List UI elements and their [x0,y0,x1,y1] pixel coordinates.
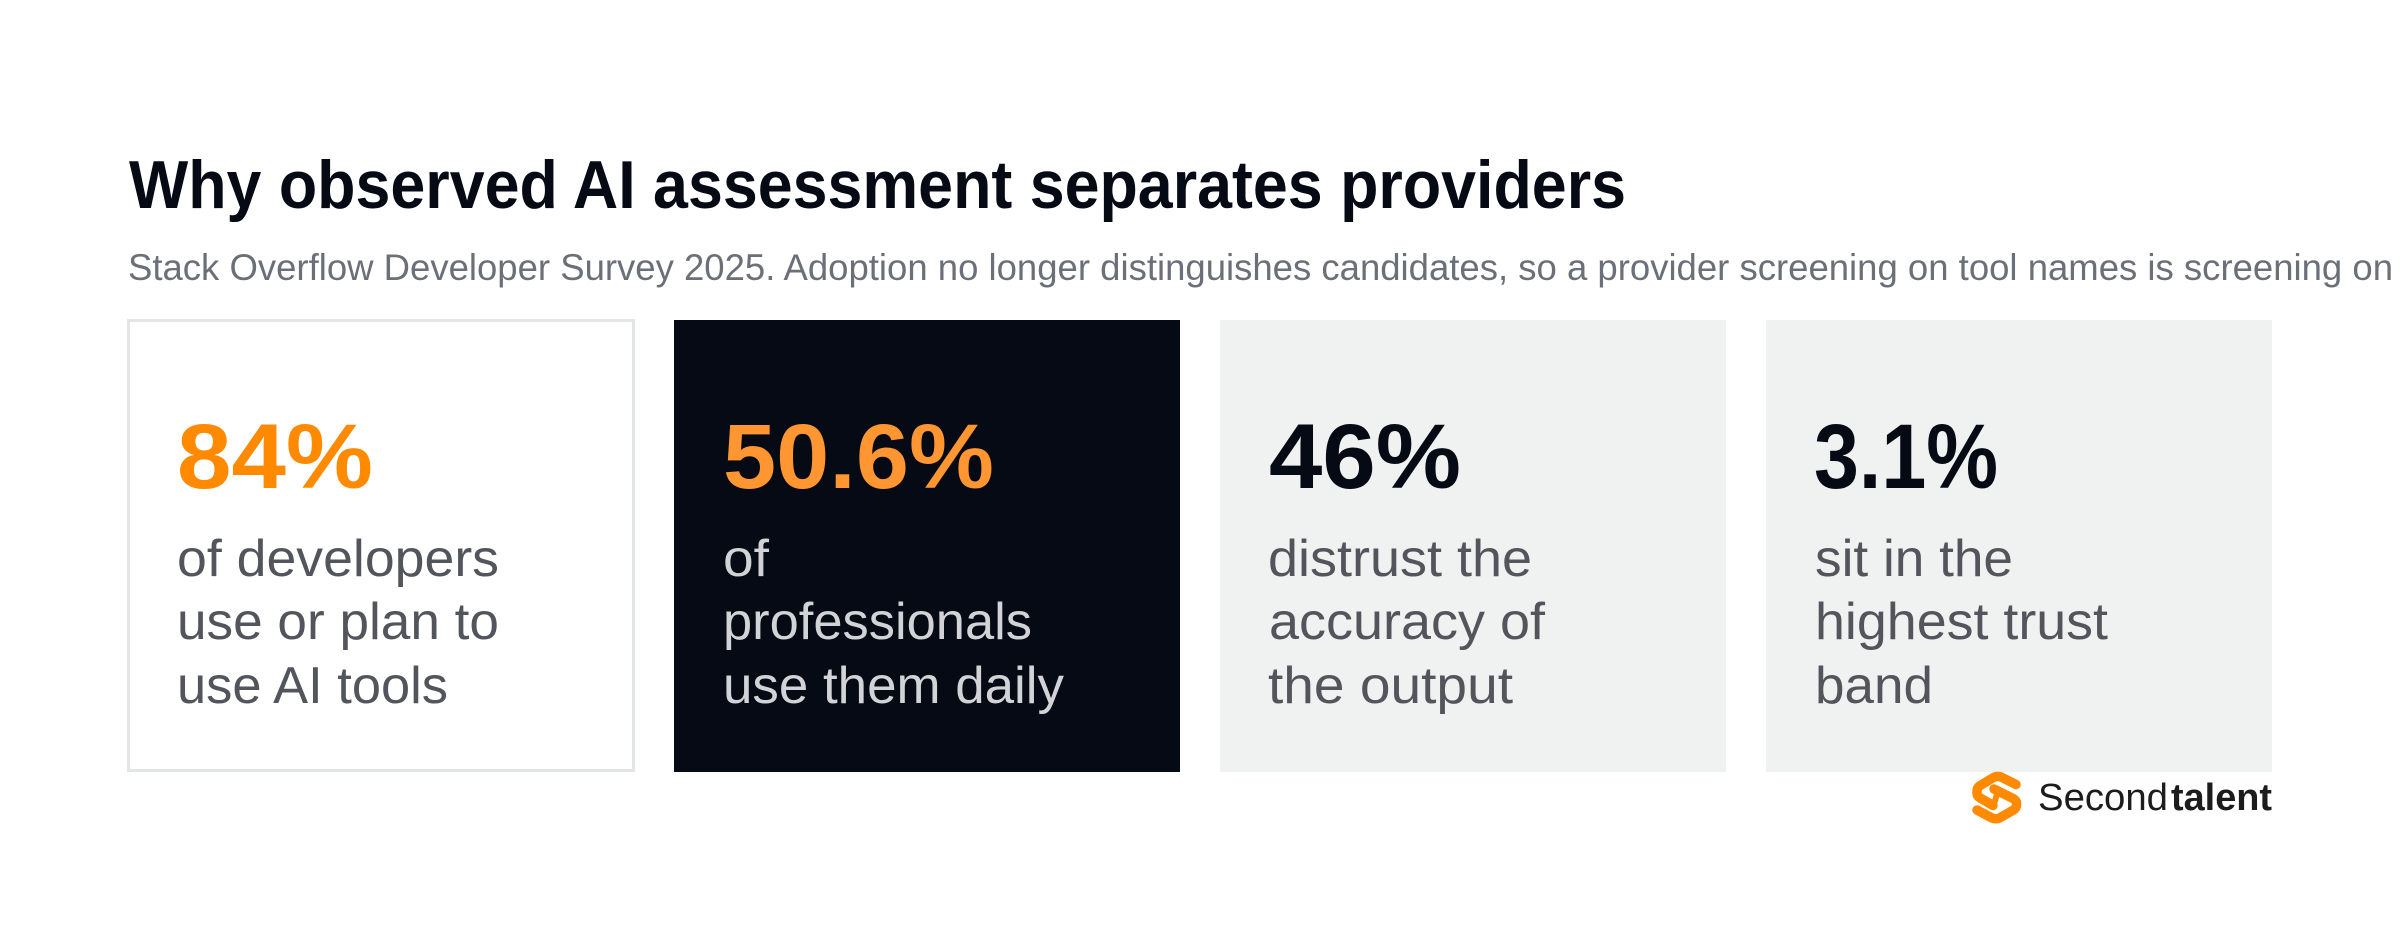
description: use them daily [723,657,1064,715]
stat: 50.6%: 50.6% [723,406,994,508]
description: the output [1268,657,1514,715]
wordmark: talent [2171,777,2272,819]
description: sit in the [1815,530,2013,588]
description: distrust the [1268,530,1532,588]
panel: 50.6% daily use [674,320,1180,772]
card background [1766,320,2272,772]
description: highest trust [1815,593,2109,651]
stat: 84%: 84% [177,406,373,508]
subtitle: Stack Overflow Developer Survey 2025. Adoption no longer distinguishes candidates, so a provider screening on tool names is screening on [128,247,2393,288]
description: use AI tools [177,657,448,715]
description [177,530,499,715]
description: of [723,530,770,588]
icon: orange S mark [1977,776,2016,819]
description: of developers [177,530,499,588]
stat: 3.1%: 3.1% [1814,406,1998,508]
card background [674,320,1180,772]
stat: 46%: 46% [1269,406,1461,508]
card background [1220,320,1726,772]
panel: 46% distrust [1220,320,1726,772]
wordmark: Second [2038,777,2168,819]
logo: Secondtalent [1977,776,2272,819]
description: professionals [723,593,1032,651]
description [1815,530,2109,715]
description: use or plan to [177,593,499,651]
description [1268,530,1546,715]
description: accuracy of [1269,593,1546,651]
card background [128,320,634,770]
panel: 3.1% highest trust [1766,320,2272,772]
title: Why observed AI assessment separates providers [129,147,1626,223]
description: band [1815,657,1933,715]
panel: 84% adoption [128,320,634,770]
description [723,530,1064,715]
